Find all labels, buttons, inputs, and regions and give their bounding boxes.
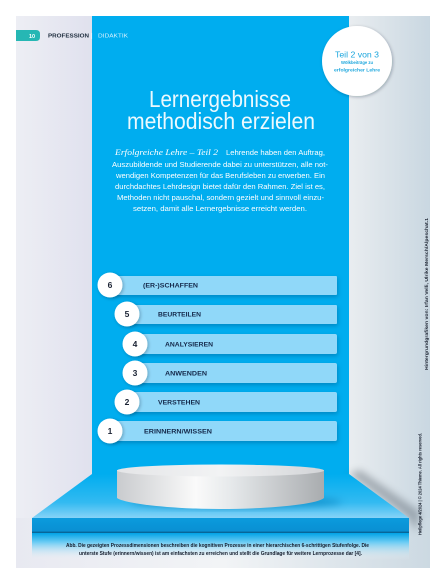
step 1: erinnern/wissen: 1 [108, 426, 113, 436]
badge: Teil 2 von 3: erfolgreicher Lehre [334, 68, 381, 72]
figure caption: unterste Stufe (erinnern/wissen) ist am einfachsten zu erreichen und stellt die Grundlage für weitere Lernprozesse dar [4]. [79, 551, 363, 557]
stage front edge [32, 518, 409, 533]
badge: Teil 2 von 3 [322, 26, 392, 96]
step 3: anwenden: 3 [133, 368, 138, 378]
badge: Teil 2 von 3: Wölkbeiträge zu [341, 60, 373, 65]
intro text: Lehrende haben den Auftrag, [226, 150, 325, 157]
step 4: analysieren: 4 [133, 339, 138, 349]
page number tab: 10 [29, 34, 35, 40]
title: Lernergebnisse [149, 86, 291, 112]
intro text: durchdachtes Lehrdesign bietet dafür den Rahmen. Ziel ist es, [115, 184, 325, 191]
intro text: wendigen Kompetenzen für das Berufsleben zu erwerben. Ein [115, 173, 325, 180]
intro text: setzen, damit alle Lernergebnisse erreicht werden. [133, 206, 307, 213]
section header: | [91, 34, 93, 40]
step 2: verstehen: 2 [125, 397, 130, 407]
step 4: analysieren [122, 332, 337, 356]
intro text: Erfolgreiche Lehre – Teil 2 [114, 147, 219, 157]
step 2: verstehen [114, 390, 337, 414]
page number tab [16, 30, 40, 41]
badge: Teil 2 von 3: Teil 2 von 3 [335, 50, 379, 60]
step 4: analysieren: ANALYSIEREN [165, 342, 213, 348]
intro text [112, 147, 329, 213]
figure caption: Abb. Die gezeigten Prozessdimensionen beschreiben die kognitiven Prozesse in einer hierarchischen 6-schrittigen Stufenfolge. Die [66, 543, 369, 549]
floor shadow on right wall [349, 470, 420, 532]
stage floor [32, 474, 409, 518]
step 1: erinnern/wissen [98, 418, 337, 444]
step 5: beurteilen: 5 [125, 309, 130, 319]
blue back wall [92, 16, 349, 478]
step 3: anwenden [122, 360, 337, 386]
section header: DIDAKTIK [98, 34, 128, 40]
step 5: beurteilen: BEURTEILEN [158, 312, 201, 318]
podium [117, 464, 342, 509]
stage reflection [32, 533, 409, 560]
step 3: anwenden: ANWENDEN [165, 372, 207, 378]
step 1: erinnern/wissen: ERINNERN/WISSEN [144, 430, 212, 436]
step 5: beurteilen [114, 302, 337, 326]
intro text: Auszubildende und Studierende dabei zu unterstützen, alle not- [112, 162, 329, 169]
step 6: (er-)schaffen [98, 272, 337, 298]
intro text: Methoden nicht pauschal, sondern gezielt und sinnvoll einzu- [117, 195, 325, 202]
title: methodisch erzielen [127, 108, 315, 134]
title [127, 86, 315, 134]
photo credit: Hintergrundgrafiken von: Irfan Velli, Ulrike Mersch/Alpeschat.1 [424, 218, 430, 370]
step 2: verstehen: VERSTEHEN [158, 400, 200, 406]
step 6: (er-)schaffen: 6 [108, 280, 113, 290]
section header: PROFESSION [48, 34, 89, 40]
copyright note: Heilpflege 4/2024 | © 2024 Thieme. All rights reserved. [416, 433, 424, 535]
figure caption [66, 543, 369, 557]
step 6: (er-)schaffen: (ER-)SCHAFFEN [143, 284, 198, 290]
pyramid chart: six process steps [98, 272, 337, 444]
section header [48, 34, 128, 40]
